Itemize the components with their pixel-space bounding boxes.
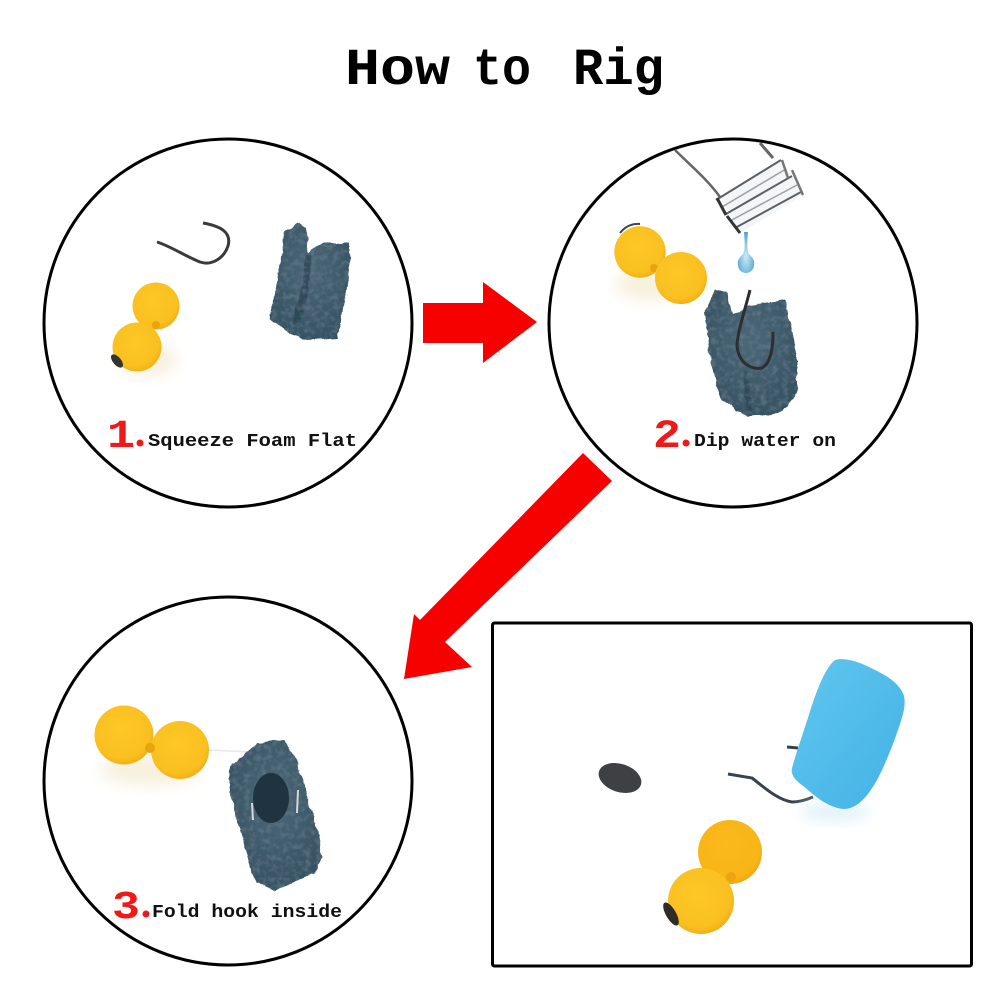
arrow: step 1 to 2 [423, 282, 537, 363]
panel: step 1 [44, 139, 412, 507]
icon: hook [728, 747, 813, 802]
icon: glass bottle [675, 143, 803, 233]
arrow: step 2 to 3 [404, 453, 612, 679]
panel: step 3 [44, 597, 412, 965]
title [345, 41, 664, 100]
icon: grey foam with hook [705, 290, 797, 417]
step 1 caption [107, 415, 357, 460]
icon: yellow beads [614, 224, 707, 304]
icon: yellow beads [109, 282, 180, 376]
step 3 caption [112, 886, 342, 931]
step 3 caption: 3 [112, 886, 140, 931]
step 2 caption [653, 415, 836, 460]
icon: grey foam [270, 222, 350, 340]
panel: step 2 [549, 139, 917, 507]
step 1 caption: Squeeze Foam Flat [148, 432, 357, 452]
icon: yellow beads [94, 706, 209, 786]
icon: folded foam [230, 739, 322, 890]
panel: finished rig [492, 623, 972, 966]
dark hollow in foam [253, 773, 289, 823]
step 1 caption: 1 [107, 415, 135, 460]
icon: water drop [738, 232, 754, 273]
icon: hook [157, 223, 229, 263]
title: to [473, 41, 531, 100]
step 2 caption: Dip water on [694, 432, 836, 452]
step 3 caption: Fold hook inside [152, 903, 342, 923]
icon: yellow beads [660, 820, 762, 934]
title: Rig [573, 41, 664, 100]
icon: fishing line [208, 750, 252, 752]
icon: blue foam [792, 659, 905, 822]
step 2 caption: 2 [653, 415, 681, 460]
title: How [345, 41, 450, 100]
icon: sinker [595, 758, 645, 798]
